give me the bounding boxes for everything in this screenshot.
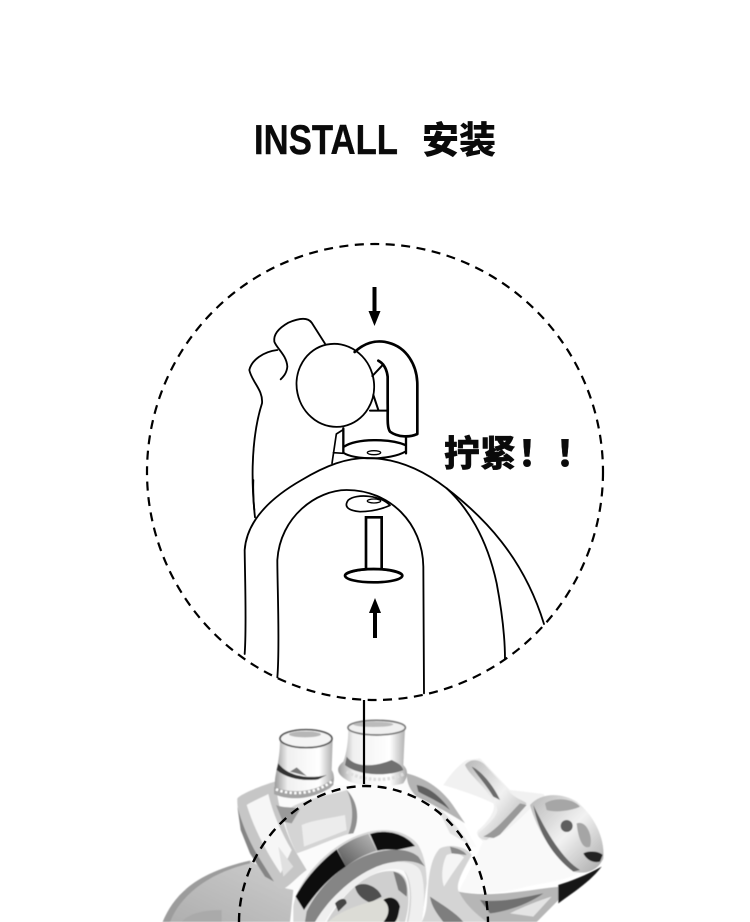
title: 安装 <box>422 110 496 164</box>
arrow: down <box>368 287 380 326</box>
label: tighten: ！ <box>556 425 592 477</box>
post 2 <box>338 721 407 786</box>
arrow: up <box>369 598 381 638</box>
small hole swirl <box>346 496 390 512</box>
title: INSTALL <box>254 116 398 163</box>
thumb and wrist outline <box>249 319 325 510</box>
pin <box>366 517 382 568</box>
ring interior <box>327 871 408 922</box>
right arm lower body <box>458 802 583 893</box>
lower streaked glass <box>447 878 580 922</box>
dashed circle on product <box>239 786 488 922</box>
product photo: glass device <box>163 720 603 922</box>
knuckle arcs <box>245 458 447 654</box>
illustration: finger and pin <box>245 458 544 693</box>
grey cap <box>163 861 293 922</box>
front glass block <box>422 846 487 922</box>
label: tighten: 拧紧 <box>444 425 516 477</box>
main glass arch <box>237 773 477 922</box>
right arm dark tip <box>558 867 602 903</box>
title <box>254 110 496 164</box>
label: tighten: ！ <box>518 425 554 477</box>
arm stripes right of post 2 <box>407 773 465 823</box>
left end of glass body <box>237 782 307 889</box>
metal ring <box>293 830 427 922</box>
elbow fitting <box>332 341 417 463</box>
fingertip circle <box>289 337 382 434</box>
connector line <box>363 700 365 784</box>
post 1 <box>275 731 334 795</box>
label: tighten <box>444 425 592 477</box>
illustration: hand and fitting <box>249 319 417 510</box>
dashed circle, enlarged detail <box>147 244 603 700</box>
right arm upper tube <box>443 758 570 843</box>
